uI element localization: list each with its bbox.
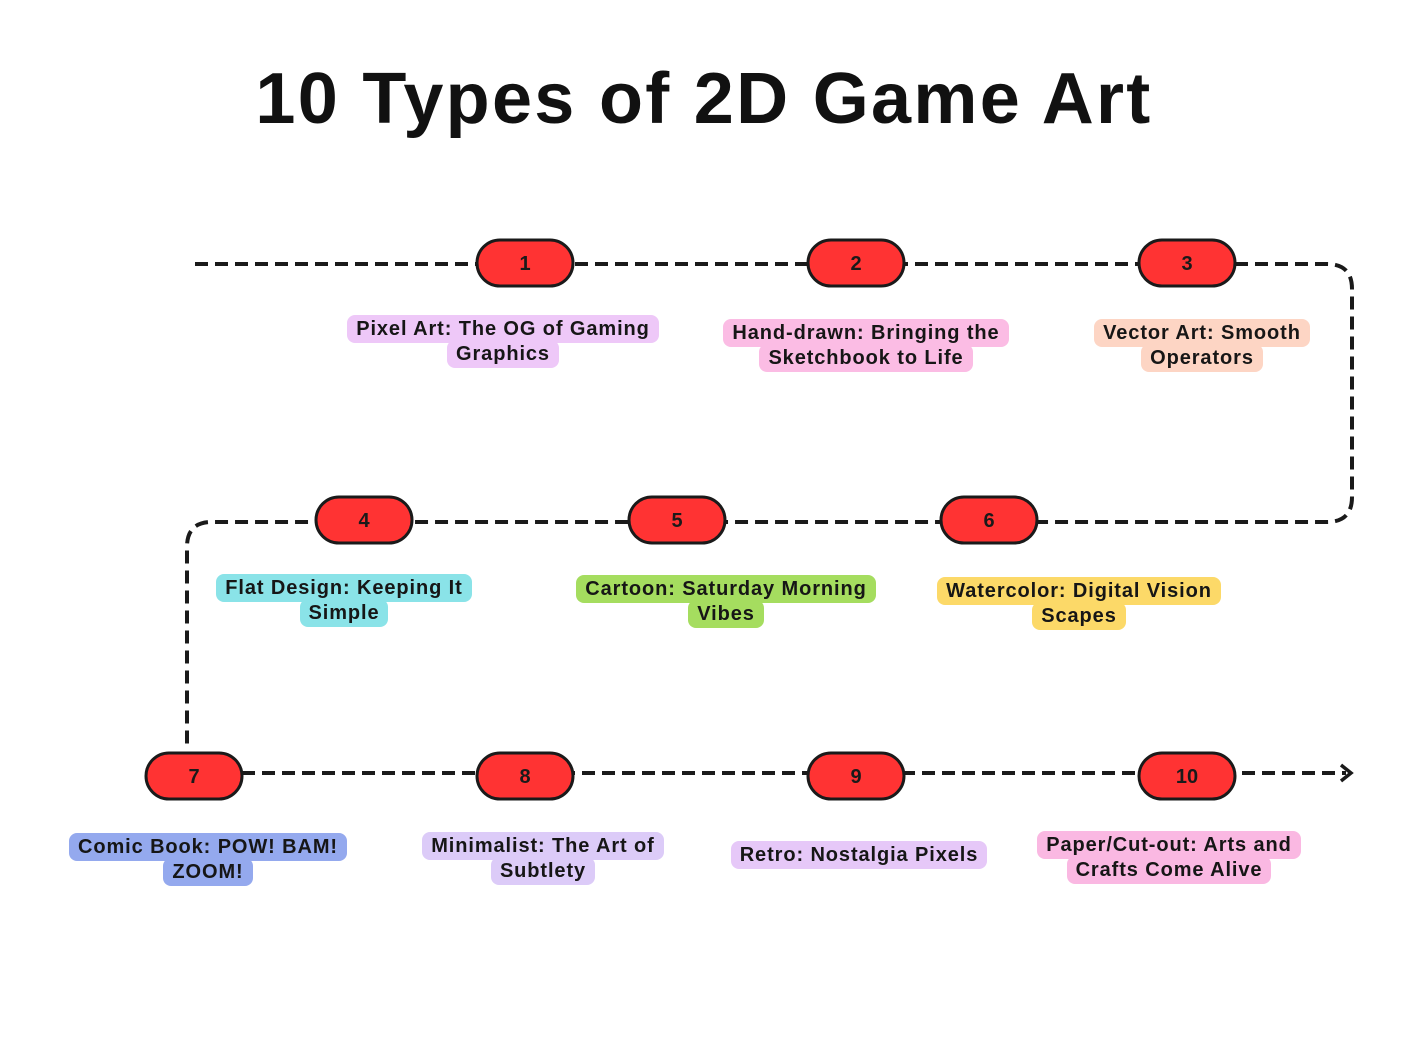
label 10: Paper/Cut-out: Arts and xyxy=(1046,834,1292,856)
label 4: Simple xyxy=(308,602,379,624)
label 8: Subtlety xyxy=(500,860,586,882)
node numbers xyxy=(188,253,1198,788)
label 1: Pixel Art: The OG of Gaming xyxy=(356,318,650,340)
node numbers: 6 xyxy=(983,510,995,532)
node numbers: 9 xyxy=(850,766,862,788)
label 2: Hand-drawn: Bringing the xyxy=(732,322,1000,344)
arrow head xyxy=(1341,765,1351,781)
label 8 xyxy=(422,832,664,885)
node numbers: 4 xyxy=(358,510,370,532)
label 3: Operators xyxy=(1150,347,1254,369)
label 10 xyxy=(1037,831,1301,884)
label 5: Vibes xyxy=(697,603,755,625)
label 6: Scapes xyxy=(1041,605,1117,627)
label 6 xyxy=(937,577,1221,630)
node numbers: 7 xyxy=(188,766,200,788)
label 5: Cartoon: Saturday Morning xyxy=(585,578,867,600)
label 8: Minimalist: The Art of xyxy=(431,835,655,857)
label 5 xyxy=(576,575,876,628)
node numbers: 5 xyxy=(671,510,683,532)
nodes xyxy=(146,240,1235,799)
label 3 xyxy=(1094,319,1310,372)
label 7: Comic Book: POW! BAM! xyxy=(78,836,338,858)
node numbers: 2 xyxy=(850,253,862,275)
node numbers: 8 xyxy=(519,766,531,788)
label 3: Vector Art: Smooth xyxy=(1103,322,1301,344)
node numbers: 10 xyxy=(1176,766,1198,788)
label 1 xyxy=(347,315,659,368)
label 2: Sketchbook to Life xyxy=(768,347,964,369)
label 4: Flat Design: Keeping It xyxy=(225,577,463,599)
label 6: Watercolor: Digital Vision xyxy=(946,580,1212,602)
node numbers: 3 xyxy=(1181,253,1193,275)
label 4 xyxy=(216,574,472,627)
label 1: Graphics xyxy=(456,343,550,365)
label 2 xyxy=(723,319,1009,372)
label 9: Retro: Nostalgia Pixels xyxy=(740,844,978,866)
node numbers: 1 xyxy=(519,253,531,275)
label 10: Crafts Come Alive xyxy=(1076,859,1262,881)
label 7 xyxy=(69,833,347,886)
label 7: ZOOM! xyxy=(172,861,244,883)
title: 10 Types of 2D Game Art xyxy=(255,59,1153,139)
